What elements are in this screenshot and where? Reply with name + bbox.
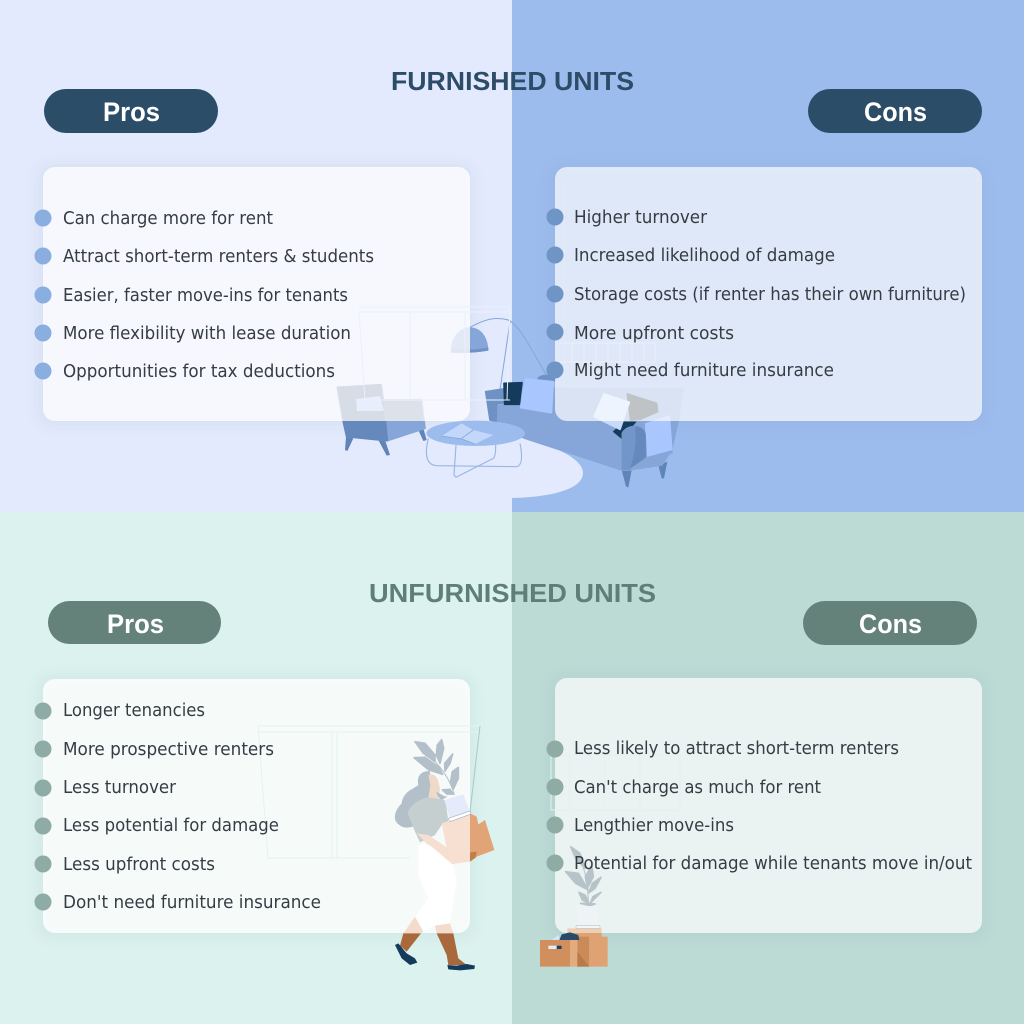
cap on box (559, 932, 579, 940)
box, off card (470, 813, 494, 862)
list: unfurnished cons: Can't charge as much for rent (574, 778, 821, 798)
title: furnished units: FURNISHED UNITS (391, 66, 634, 96)
sofa (486, 379, 683, 487)
stacked box, on card (567, 928, 602, 937)
list: unfurnished pros: More prospective renters (63, 740, 274, 760)
trousers (415, 844, 457, 932)
illustration: woman carrying box and plant (395, 740, 494, 970)
card: furnished cons (555, 167, 982, 421)
list: furnished pros: More flexibility with lease duration (63, 324, 351, 344)
panel: unfurnished cons background (512, 512, 1024, 1024)
list: unfurnished pros: Less upfront costs (63, 855, 215, 875)
rug (512, 436, 583, 498)
pill: unfurnished cons: Cons (859, 609, 922, 639)
panel: furnished pros background (0, 0, 512, 512)
list: furnished cons: More upfront costs (574, 324, 734, 344)
coffee table (426, 421, 525, 477)
card: unfurnished cons (555, 678, 982, 933)
list: unfurnished pros: Longer tenancies (63, 701, 205, 721)
list: furnished pros: Can charge more for rent (63, 209, 273, 229)
list: furnished pros (34, 209, 374, 382)
illustration: window and radiator, furnished (359, 307, 655, 400)
list: furnished cons: Higher turnover (574, 208, 708, 228)
list: furnished cons: Storage costs (if renter has their own furniture) (574, 285, 966, 305)
pill: furnished pros (44, 89, 218, 133)
illustration: window and radiator, unfurnished (258, 726, 680, 858)
pot (577, 906, 598, 926)
panel: unfurnished pros background (0, 512, 512, 1024)
list: furnished cons: Increased likelihood of damage (574, 246, 835, 266)
list: unfurnished pros (34, 701, 321, 913)
shoes (395, 943, 417, 965)
panel: furnished cons background (512, 0, 1024, 512)
pill: unfurnished pros (48, 601, 221, 644)
pot (444, 794, 470, 818)
list: furnished pros: Easier, faster move-ins for tenants (63, 286, 348, 306)
plant leaves (566, 847, 601, 906)
pill: furnished cons: Cons (864, 97, 927, 127)
illustration: plant and moving boxes (540, 847, 608, 967)
card: furnished pros (43, 167, 470, 421)
title: unfurnished units: UNFURNISHED UNITS (369, 578, 656, 608)
list: unfurnished cons: Potential for damage while tenants move in/out (574, 854, 972, 874)
illustration: furnished living room (337, 318, 683, 498)
armchair (337, 385, 427, 456)
shadows (37, 163, 986, 939)
legs on card (403, 917, 453, 933)
label (548, 946, 562, 949)
arm (417, 833, 451, 863)
pill: furnished pros: Pros (103, 97, 160, 127)
head (428, 774, 440, 800)
armchair seen through card (337, 384, 424, 421)
plant (414, 740, 458, 795)
box, on card (442, 813, 470, 864)
list: unfurnished pros: Less turnover (63, 778, 177, 798)
list: furnished pros: Opportunities for tax deductions (63, 362, 335, 382)
card: unfurnished pros (43, 679, 470, 933)
pill: unfurnished pros: Pros (107, 609, 164, 639)
list: unfurnished cons: Less likely to attract short-term renters (574, 739, 899, 759)
list: furnished pros: Attract short-term renters & students (63, 247, 374, 267)
list: unfurnished pros: Less potential for damage (63, 816, 279, 836)
floor lamp (451, 318, 556, 390)
pill: furnished cons (808, 89, 982, 133)
boxes (540, 940, 572, 967)
list: unfurnished cons: Lengthier move-ins (574, 816, 734, 836)
shirt (408, 797, 448, 842)
hair (395, 771, 432, 828)
pill: unfurnished cons (803, 601, 977, 645)
legs (400, 933, 467, 965)
list: furnished cons: Might need furniture insurance (574, 361, 834, 381)
list: furnished cons (546, 208, 966, 381)
list: unfurnished pros: Don't need furniture insurance (63, 893, 321, 913)
list: unfurnished cons (546, 739, 972, 874)
